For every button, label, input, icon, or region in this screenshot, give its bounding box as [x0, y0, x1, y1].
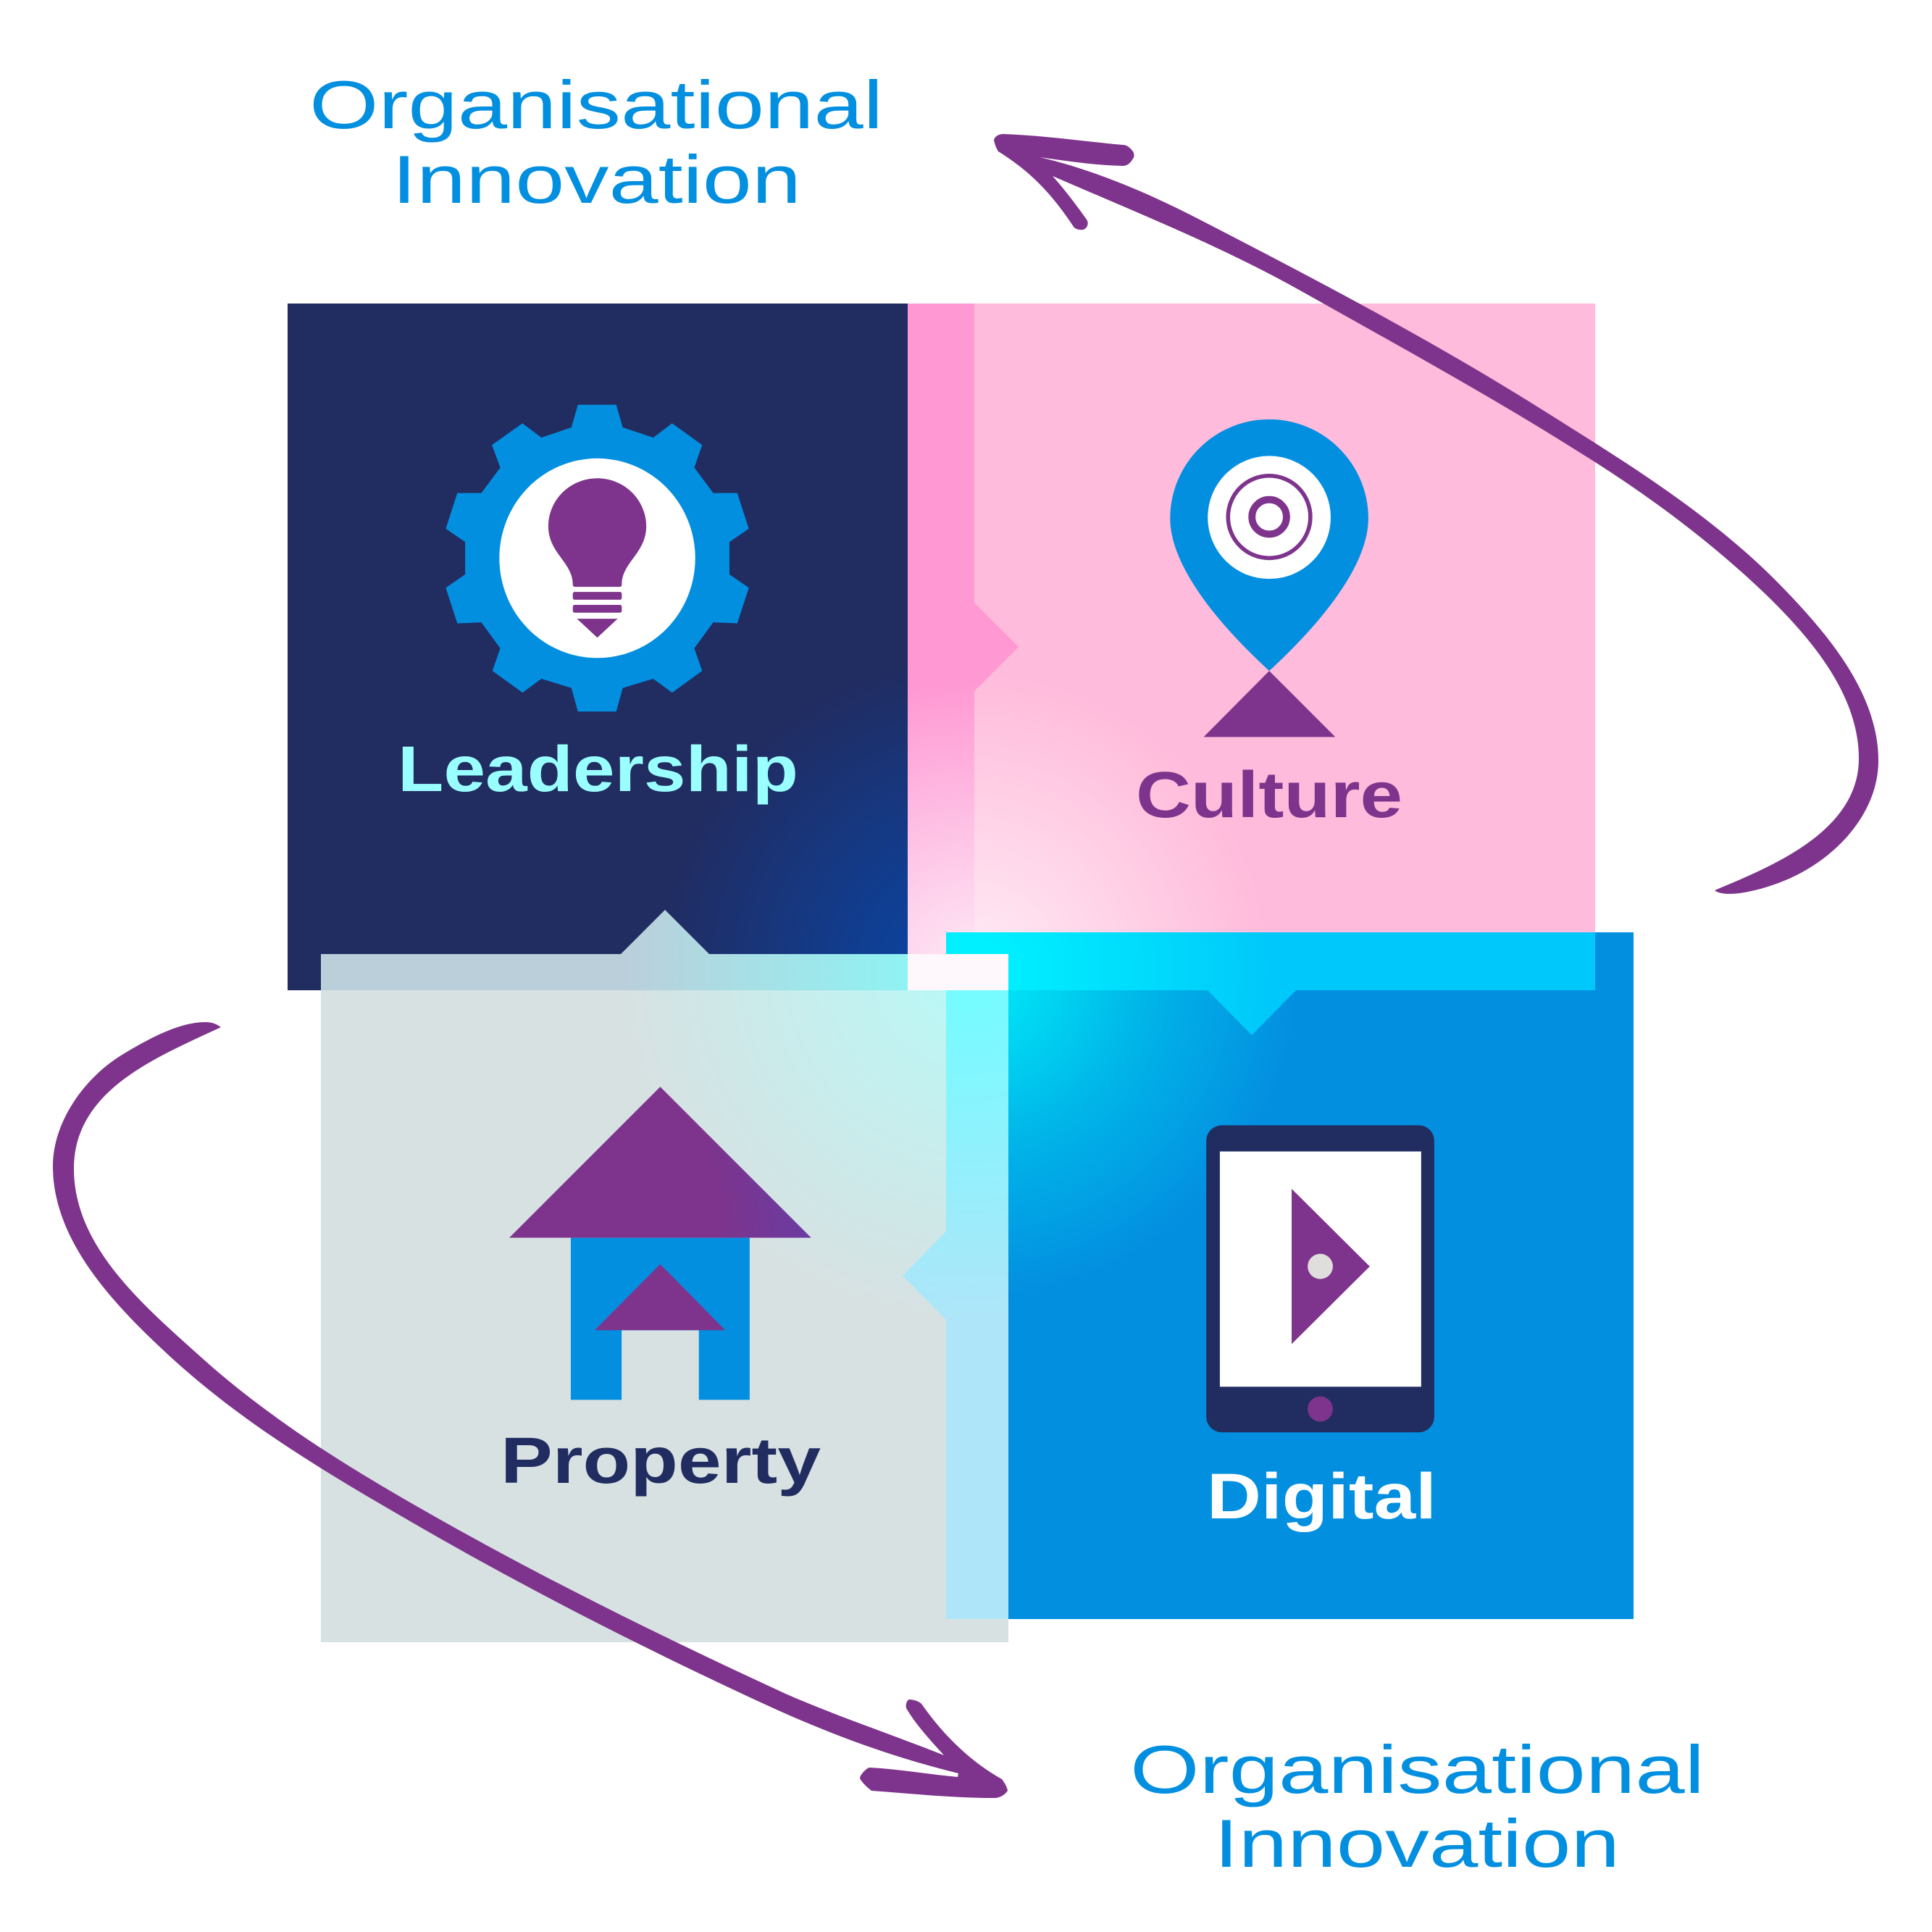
label: Property: Property [501, 1425, 821, 1497]
panel: property [321, 910, 1008, 1642]
title: bottom Organisational Innovation [1130, 1731, 1705, 1881]
property top band with pointer [321, 910, 908, 990]
central overlap [908, 954, 1008, 990]
icon: house [509, 1087, 811, 1400]
icon: tablet with play button [1206, 1125, 1434, 1432]
title: top Organisational Innovation [309, 67, 883, 217]
digital top band with pointer [946, 932, 1595, 1035]
panel: digital [946, 932, 1634, 1619]
arrow: bottom left curved arrow [53, 1022, 1008, 1798]
label: Digital: Digital [1207, 1460, 1437, 1532]
label: Leadership: Leadership [398, 732, 798, 805]
property side band with pointer [903, 990, 1008, 1619]
culture square [974, 304, 1595, 941]
title: top Organisational Innovation: Innovation [392, 141, 801, 217]
title: bottom Organisational Innovation: Innovation [1214, 1805, 1620, 1881]
label: Culture: Culture [1136, 759, 1402, 832]
culture side band with pointer [908, 304, 1019, 954]
title: bottom Organisational Innovation: Organisational [1130, 1731, 1705, 1807]
property square [321, 990, 1008, 1642]
title: top Organisational Innovation: Organisational [309, 67, 883, 143]
digital square [1008, 932, 1634, 1619]
panel: leadership [288, 304, 908, 990]
leadership square [288, 304, 908, 990]
panel: culture [908, 304, 1595, 954]
arrow: top right curved arrow [994, 134, 1878, 894]
icon: location pin with target [1170, 419, 1368, 737]
icon: gear with light bulb [446, 405, 749, 711]
